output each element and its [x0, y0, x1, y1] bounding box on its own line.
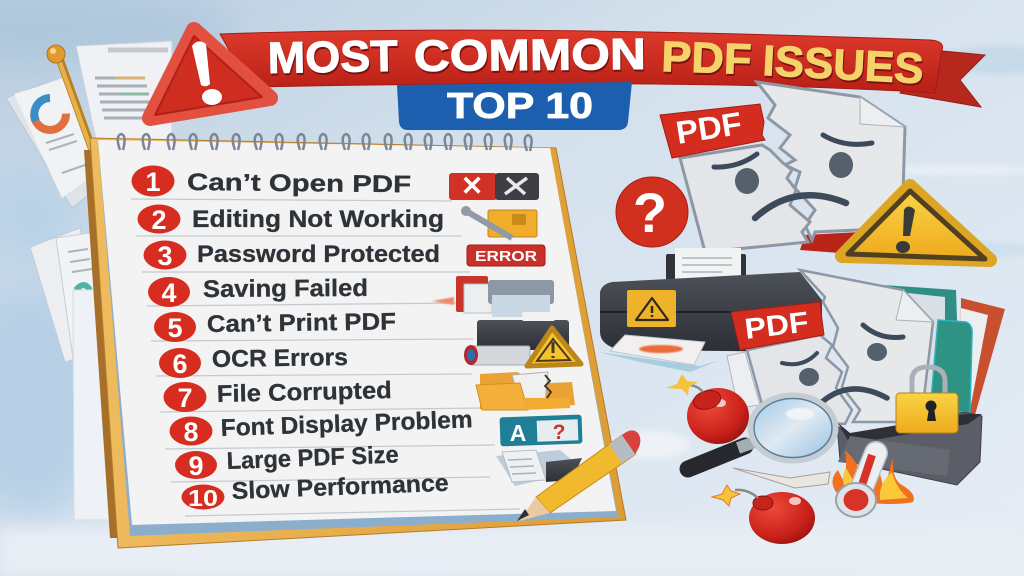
item 10: Slow Performance [231, 470, 449, 505]
item 4: 4 [161, 278, 177, 308]
torn sad PDF document (lower) [731, 270, 933, 424]
icon: error tag [467, 245, 545, 266]
title: MOST COMMON [267, 30, 646, 83]
paper with donut chart [6, 76, 108, 208]
title banner tail [900, 50, 985, 107]
item 6: 6 [172, 349, 188, 379]
blue ribbon: top 10 [397, 82, 632, 130]
item 7: 7 [177, 383, 193, 413]
icon: X and tools [449, 171, 539, 201]
item 2: Editing Not Working [192, 206, 444, 233]
red ribbon under document [800, 232, 860, 253]
pdf label: PDF [673, 105, 744, 151]
left half [747, 335, 852, 424]
warning sticker [627, 290, 676, 327]
icon: paper and printer [496, 450, 584, 486]
title: PDF ISSUES: PDF [661, 33, 752, 84]
item 7 [164, 377, 392, 413]
icon: printer, roll and warning [464, 312, 581, 366]
title: MOST COMMON: MOST [267, 32, 398, 83]
icon: magnifying glass [688, 395, 836, 469]
icon: font problem: A [510, 420, 526, 446]
torn sad PDF document (top) [616, 82, 990, 260]
right half [800, 270, 933, 422]
icon: font problem: ? [553, 421, 565, 444]
title: PDF ISSUES: ISSUES [761, 37, 925, 93]
item 10 [182, 470, 449, 511]
title: PDF ISSUES [661, 33, 925, 93]
item 7: File Corrupted [217, 377, 392, 408]
item 1 [132, 166, 411, 198]
item 4 [148, 275, 368, 308]
icon: thermometer [836, 453, 876, 517]
item 2: 2 [151, 205, 167, 235]
item 9 [175, 441, 399, 481]
left half of page [680, 145, 810, 252]
icon: yellow warning [842, 186, 990, 260]
gold backing [90, 138, 626, 548]
icon: padlock [896, 367, 958, 433]
title banner [220, 30, 942, 93]
notepad [73, 134, 626, 548]
icon: corrupted folder [476, 372, 575, 410]
item 1: Can’t Open PDF [187, 169, 411, 198]
folders and tray stack [840, 282, 1005, 415]
title: MOST COMMON: COMMON [414, 30, 646, 81]
item 3: 3 [157, 241, 173, 271]
back sheets [73, 150, 132, 538]
pdf label [660, 104, 765, 158]
page fold [860, 97, 905, 127]
item 9: 9 [188, 451, 204, 481]
printer [598, 248, 822, 372]
icon: red folder and printer [432, 276, 554, 317]
item 9: Large PDF Size [226, 441, 399, 475]
icon: red warning triangle [150, 30, 270, 118]
item 6: OCR Errors [212, 344, 348, 373]
right brow and eye [823, 135, 872, 144]
spiral rings [118, 134, 532, 151]
paper in feeder [666, 248, 746, 284]
item 8: Font Display Problem [220, 406, 473, 442]
lower stacked papers [30, 228, 112, 375]
icon: X and tools: ✕ [461, 171, 483, 201]
item 5: 5 [167, 313, 183, 343]
pdf label: PDF [743, 306, 810, 346]
white page [98, 140, 616, 525]
golden flag pole [47, 45, 96, 160]
item 3: Password Protected [197, 241, 440, 268]
blue page edge [98, 142, 618, 536]
pdf label [731, 302, 824, 350]
item 6 [159, 344, 348, 379]
item 10: 10 [188, 485, 218, 511]
torn scrap under magnifier [733, 468, 830, 488]
icon: font problem [500, 415, 582, 446]
printed sheet [598, 335, 720, 372]
question circle [616, 177, 688, 247]
small list paper [727, 352, 760, 408]
background papers left [6, 41, 172, 375]
item 2 [138, 204, 444, 235]
icon: bomb upper [666, 374, 749, 444]
blue ribbon: top 10: TOP 10 [447, 85, 593, 126]
item 5 [154, 308, 396, 343]
icon: bomb lower [712, 485, 815, 544]
right half of page [757, 82, 905, 240]
icon: pencil [517, 430, 640, 521]
item 3 [144, 240, 440, 271]
left brow and eye [714, 154, 757, 167]
item 1: 1 [145, 167, 161, 197]
item 8: 8 [183, 417, 199, 447]
report paper [76, 41, 172, 140]
sad mouth [755, 195, 846, 218]
icon: flames [832, 450, 914, 504]
item 4: Saving Failed [203, 275, 368, 303]
dark tray [837, 412, 982, 485]
icon: wrench and lock folder [461, 206, 537, 238]
item 5: Can’t Print PDF [207, 308, 396, 338]
question circle: ? [633, 181, 667, 244]
icon: error tag: ERROR [475, 248, 537, 265]
